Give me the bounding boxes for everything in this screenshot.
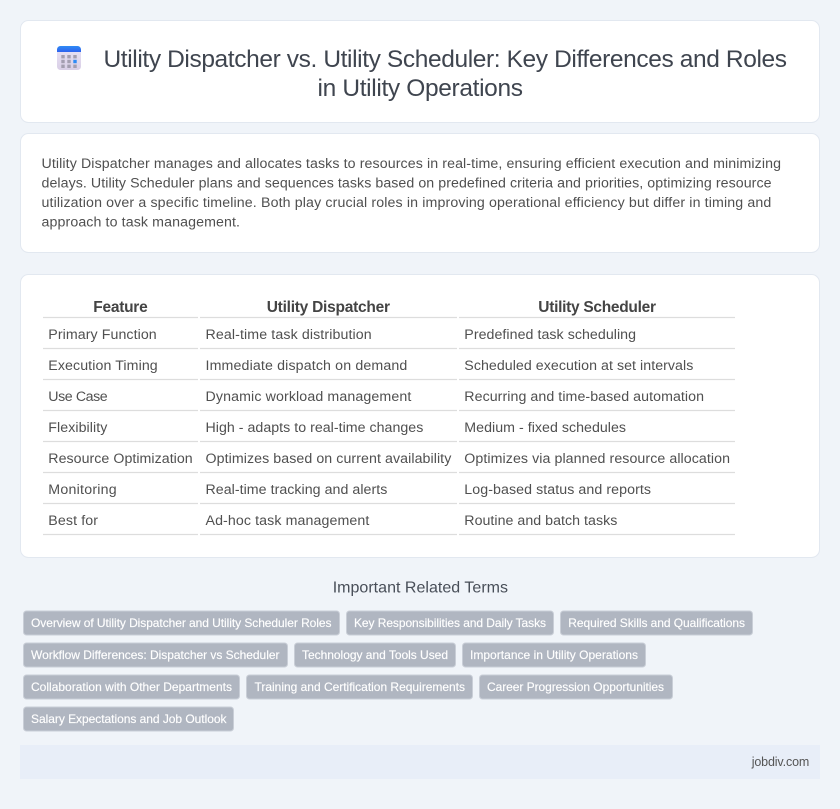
tag: Technology and Tools Used bbox=[302, 648, 448, 662]
row: Execution Timing bbox=[43, 358, 735, 380]
tag bbox=[346, 611, 554, 635]
tag bbox=[24, 643, 288, 667]
footer bar: jobdiv.com bbox=[751, 755, 809, 769]
tag: Training and Certification Requirements bbox=[254, 680, 465, 694]
text block: summary paragraph: delays. Utility Scheduler plans and sequences tasks based on predefined criteria and priorities, optimizing resource bbox=[42, 176, 772, 192]
icon: calendar bbox=[57, 46, 81, 70]
text block: summary paragraph: approach to task management. bbox=[42, 214, 240, 230]
row: Best for: Ad-hoc task management bbox=[206, 513, 369, 529]
tag bbox=[24, 675, 240, 699]
tag: Workflow Differences: Dispatcher vs Scheduler bbox=[31, 648, 280, 662]
row: Primary Function: Primary Function bbox=[48, 327, 157, 343]
row: Best for: Routine and batch tasks bbox=[464, 513, 617, 529]
text block: summary paragraph: Utility Dispatcher manages and allocates tasks to resources in real-time, ensuring efficient execution and minimizing bbox=[42, 156, 781, 172]
row: Resource Optimization: Optimizes via planned resource allocation bbox=[464, 451, 730, 467]
tag bbox=[294, 643, 456, 667]
row: Resource Optimization: Optimizes based on current availability bbox=[206, 451, 452, 467]
tag bbox=[24, 707, 234, 731]
row: Execution Timing: Execution Timing bbox=[48, 358, 158, 374]
table header row bbox=[43, 299, 735, 318]
tag: Overview of Utility Dispatcher and Utility Scheduler Roles bbox=[31, 616, 332, 630]
row: Use Case: Use Case bbox=[48, 389, 108, 405]
tag: Importance in Utility Operations bbox=[470, 648, 638, 662]
row: Resource Optimization: Resource Optimization bbox=[48, 451, 193, 467]
row: Primary Function: Predefined task scheduling bbox=[464, 327, 636, 343]
tag bbox=[560, 611, 752, 635]
tag: Required Skills and Qualifications bbox=[568, 616, 745, 630]
row: Flexibility: High - adapts to real-time changes bbox=[206, 420, 423, 436]
row: Best for: Best for bbox=[48, 513, 98, 529]
row: Use Case: Dynamic workload management bbox=[206, 389, 411, 405]
panel: comparison table bbox=[20, 274, 820, 558]
row: Flexibility bbox=[43, 420, 735, 442]
tag: Salary Expectations and Job Outlook bbox=[31, 712, 228, 726]
panel: related term tags bbox=[24, 611, 752, 731]
tag bbox=[462, 643, 646, 667]
header panel bbox=[20, 20, 820, 122]
tag bbox=[480, 675, 672, 699]
text block: summary paragraph bbox=[42, 156, 781, 230]
footer bar bbox=[20, 745, 820, 779]
row: Use Case: Recurring and time-based automation bbox=[464, 389, 704, 405]
title: Utility Dispatcher vs. Utility Scheduler: Key Differences and Roles bbox=[104, 46, 787, 73]
row: Use Case bbox=[43, 389, 735, 410]
tag: Collaboration with Other Departments bbox=[31, 680, 232, 694]
table header row: Feature bbox=[93, 299, 148, 316]
title bbox=[104, 46, 787, 102]
row: Flexibility: Flexibility bbox=[48, 420, 108, 436]
table header row: Utility Dispatcher bbox=[267, 299, 390, 316]
tag bbox=[246, 675, 472, 699]
tag bbox=[24, 611, 340, 635]
row: Primary Function: Real-time task distribution bbox=[206, 327, 372, 343]
text block: summary paragraph: utilization over a specific timeline. Both play crucial roles in improving operational efficiency but differ in timing and bbox=[42, 195, 771, 211]
row: Resource Optimization bbox=[43, 451, 735, 472]
row: Execution Timing: Immediate dispatch on demand bbox=[206, 358, 407, 374]
row: Flexibility: Medium - fixed schedules bbox=[464, 420, 626, 436]
table header row: Utility Scheduler bbox=[538, 299, 656, 316]
title: in Utility Operations bbox=[318, 75, 523, 102]
row: Monitoring: Monitoring bbox=[48, 482, 117, 498]
row: Monitoring: Log-based status and reports bbox=[464, 482, 651, 498]
tag: Career Progression Opportunities bbox=[487, 680, 664, 694]
row: Best for bbox=[43, 513, 735, 534]
heading: related terms: Important Related Terms bbox=[333, 580, 508, 597]
row: Execution Timing: Scheduled execution at set intervals bbox=[464, 358, 693, 374]
row: Monitoring bbox=[43, 482, 735, 504]
panel: introduction bbox=[20, 134, 820, 252]
row: Monitoring: Real-time tracking and alerts bbox=[206, 482, 387, 498]
tag: Key Responsibilities and Daily Tasks bbox=[354, 616, 546, 630]
row: Primary Function bbox=[43, 327, 735, 348]
